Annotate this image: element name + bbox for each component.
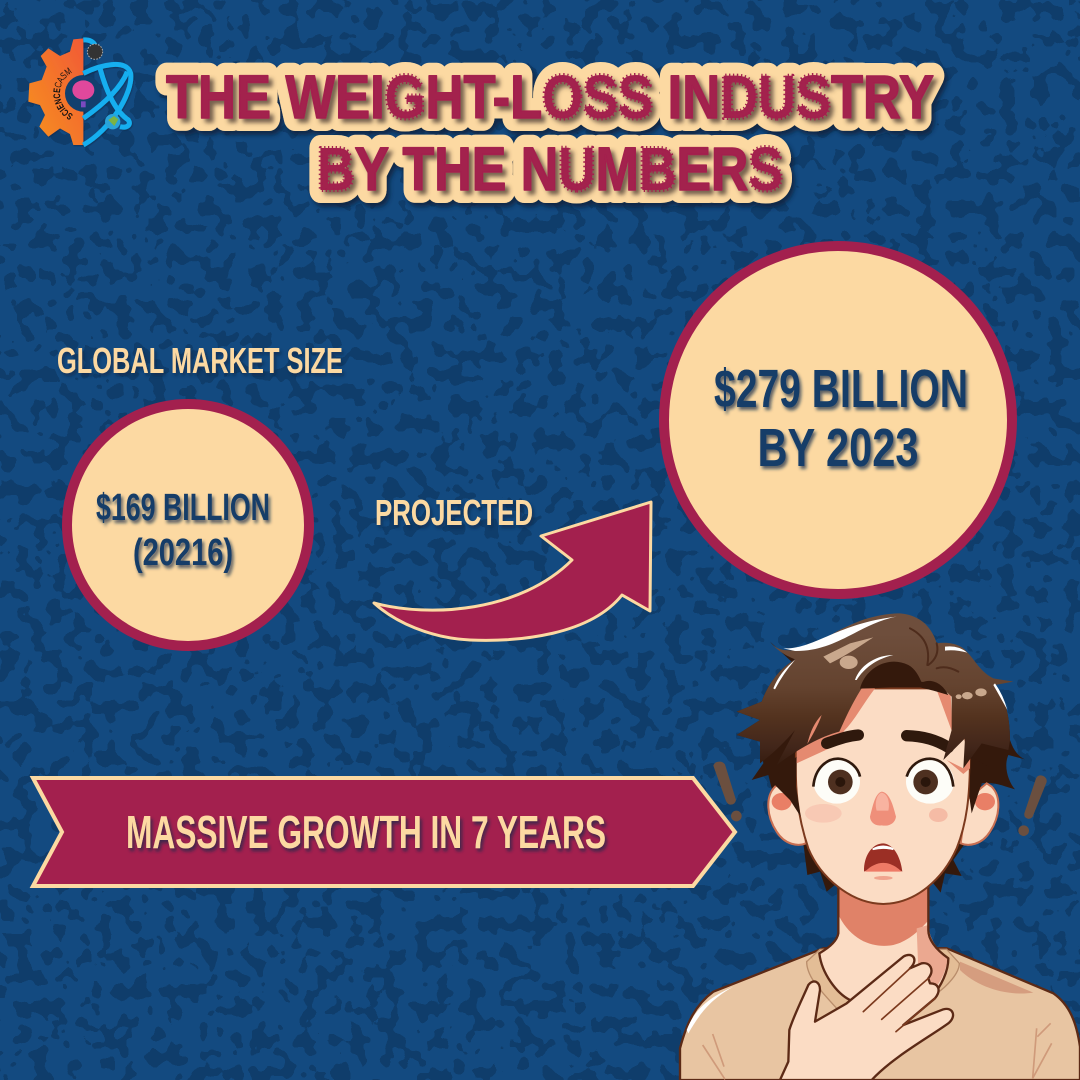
exclamation left bbox=[713, 762, 742, 821]
forehead shadow right bbox=[937, 690, 953, 733]
title line 2: BY THE NUMBERS bbox=[317, 135, 783, 203]
circle: 2023 projection bbox=[664, 246, 1012, 594]
logo lettering: SCIENCECASM bbox=[53, 67, 72, 120]
shirt shoulder highlight bbox=[687, 987, 733, 1033]
right eye bbox=[906, 759, 954, 804]
front hair bbox=[737, 613, 1013, 768]
arrow: growth bbox=[374, 502, 651, 640]
sideburn left bbox=[770, 757, 801, 817]
circle: 2016 market size bbox=[67, 404, 309, 646]
right ear bbox=[961, 783, 998, 845]
face bbox=[796, 688, 970, 904]
shirt shade bbox=[960, 962, 1033, 994]
title line 1: THE WEIGHT-LOSS INDUSTRY bbox=[166, 63, 934, 131]
forehead shadow bbox=[797, 688, 875, 763]
exclamation right bbox=[1018, 775, 1047, 836]
hair strand lines bbox=[910, 628, 958, 672]
banner: massive growth bbox=[33, 778, 735, 886]
value: by 2023: BY 2023 bbox=[758, 418, 918, 478]
label: projected: PROJECTED bbox=[375, 492, 533, 533]
shirt bbox=[680, 948, 1080, 1080]
left eye bbox=[813, 759, 860, 804]
left ear bbox=[768, 783, 806, 845]
title line 2: BY THE NUMBERS bbox=[317, 135, 783, 203]
hair dark fringe bbox=[860, 662, 948, 695]
hair highlights bbox=[783, 617, 897, 651]
logo earth bbox=[105, 114, 120, 129]
logo bulb bbox=[81, 101, 86, 107]
finger lines bbox=[863, 968, 935, 1032]
nose bbox=[870, 792, 896, 826]
neck shadow bbox=[839, 887, 927, 946]
sideburn right bbox=[969, 757, 988, 813]
value: year: (20216) bbox=[133, 532, 233, 574]
skin gap in hair bbox=[807, 715, 822, 744]
neck side shade bbox=[917, 925, 947, 988]
sleeve folds bbox=[703, 1023, 1052, 1079]
temple shadow right bbox=[947, 757, 970, 774]
logo gear half bbox=[28, 38, 83, 145]
value: 279 billion: $279 BILLION bbox=[714, 359, 968, 419]
hand bbox=[780, 955, 953, 1080]
back hair bbox=[737, 642, 1025, 893]
logo atom orbits bbox=[83, 40, 131, 145]
cheek right bbox=[929, 808, 948, 822]
cheek left bbox=[805, 804, 842, 823]
right eyebrow bbox=[907, 736, 948, 747]
logo hub bbox=[65, 75, 102, 112]
logo brain bbox=[72, 80, 94, 100]
title line 1: THE WEIGHT-LOSS INDUSTRY bbox=[166, 63, 934, 131]
banner text: MASSIVE GROWTH IN 7 YEARS bbox=[126, 806, 606, 858]
logo: Sciencecasm gear and atom bbox=[28, 37, 134, 148]
left eyebrow bbox=[827, 735, 858, 743]
neck outline bbox=[819, 883, 948, 1000]
title bbox=[166, 63, 934, 203]
mouth bbox=[864, 843, 902, 880]
character: surprised man bbox=[680, 613, 1080, 1080]
logo moon bbox=[87, 44, 103, 59]
value: 169 billion: $169 BILLION bbox=[96, 487, 270, 529]
shirt collar bbox=[807, 949, 959, 1008]
label: global market size: GLOBAL MARKET SIZE bbox=[57, 340, 343, 381]
neck bbox=[819, 883, 948, 1000]
